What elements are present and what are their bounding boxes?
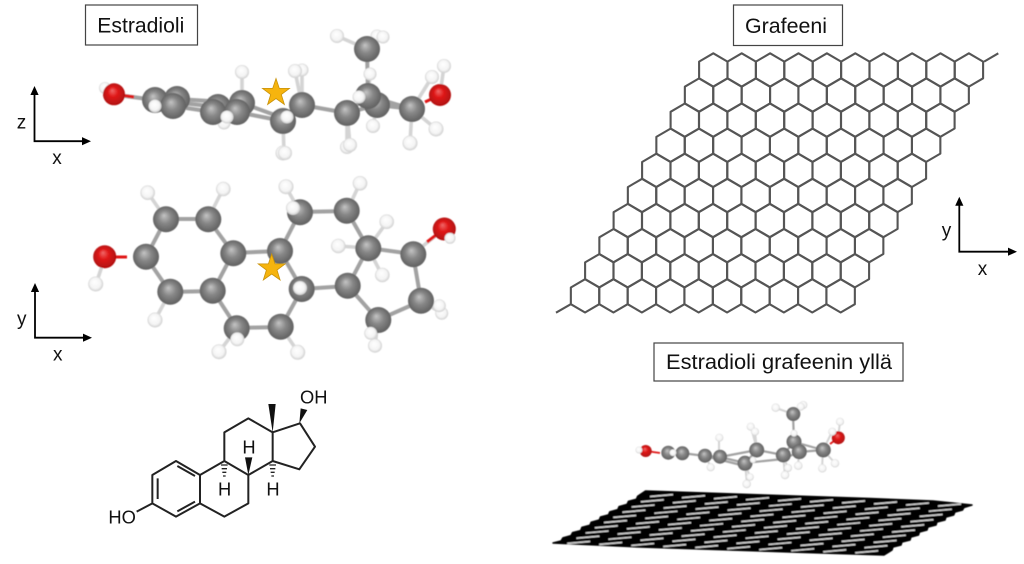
skeletal formula: estradiol [108, 387, 327, 527]
axes: y and x left: y [17, 309, 27, 330]
skeletal formula: estradiol: OH [300, 387, 327, 408]
heading: Estradioli [86, 5, 198, 45]
axes: y and x left [17, 283, 92, 366]
skeletal formula: estradiol: H [242, 437, 256, 458]
icon: star on side view [262, 78, 290, 104]
molecule: estradiol top view [88, 176, 456, 360]
heading: Estradioli grafeenin yllä [654, 343, 903, 381]
axes: y and x right: y [942, 221, 952, 242]
skeletal formula: estradiol: HO [108, 506, 136, 527]
heading: Estradioli: Estradioli [97, 15, 184, 38]
axes: y and x left: x [53, 345, 63, 366]
axes: z and x [17, 86, 91, 169]
heading: Grafeeni [734, 5, 842, 46]
axes: z and x: z [17, 112, 26, 133]
axes: z and x: x [52, 148, 62, 169]
axes: y and x right: x [978, 259, 988, 280]
molecule: estradiol above graphene [636, 401, 845, 488]
skeletal formula: estradiol: H [218, 478, 231, 499]
skeletal formula: estradiol: H [266, 478, 280, 499]
axes: y and x right [942, 197, 1017, 280]
graphene sheet in perspective [553, 491, 972, 555]
graphene lattice [556, 53, 998, 313]
heading: Grafeeni: Grafeeni [745, 15, 827, 38]
icon: star on top view [258, 254, 285, 280]
molecule: estradiol side view [99, 29, 451, 160]
heading: Estradioli grafeenin yllä: Estradioli grafeenin yllä [666, 351, 892, 374]
